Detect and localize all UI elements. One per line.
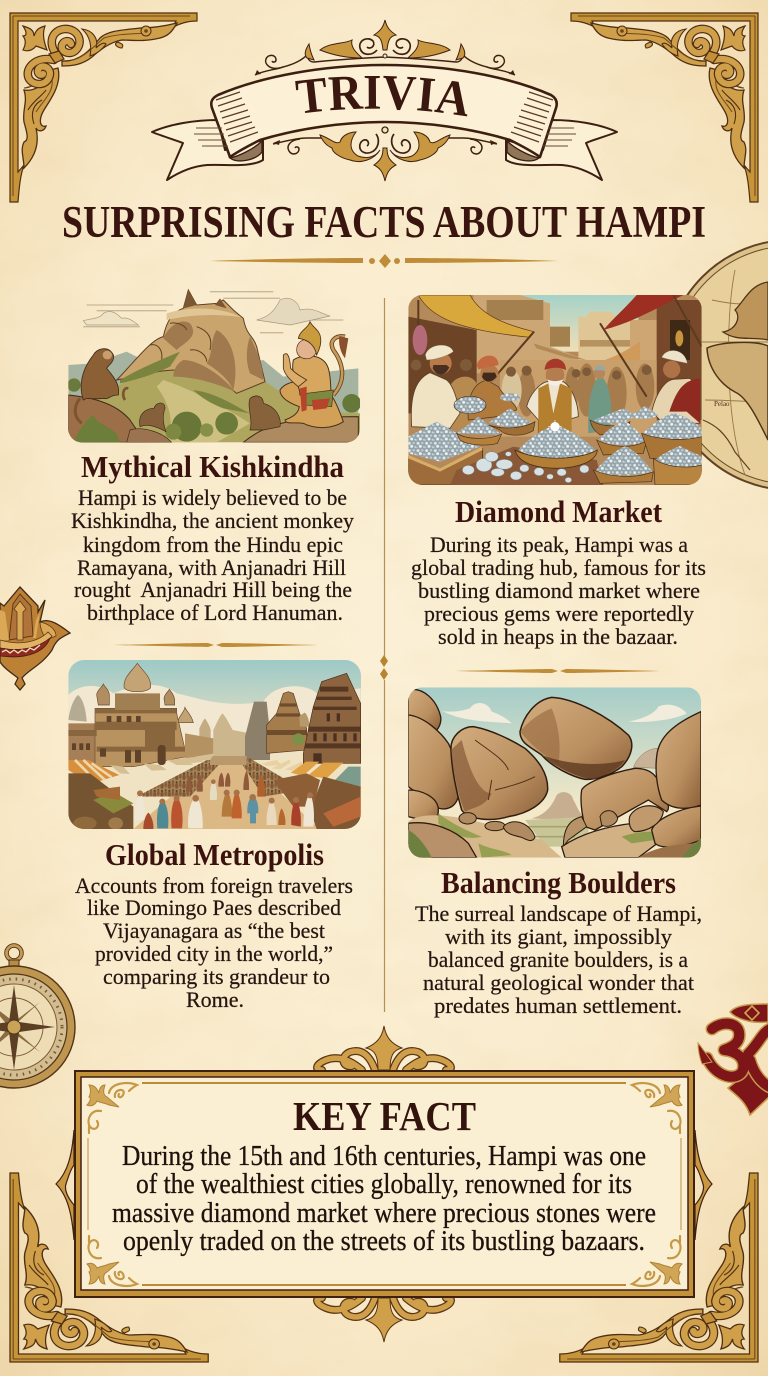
- left panel divider: [113, 643, 318, 647]
- corner ornament top left: [10, 13, 197, 202]
- corner ornament bottom right: [560, 1173, 758, 1362]
- body text: diamond market: bustling diamond market where: [418, 578, 700, 603]
- illustration: vijayanagara city street: [68, 660, 361, 830]
- panel: key fact: [56, 1026, 712, 1342]
- body text: mythical kishkindha: rought Anjanadri Hill being the: [74, 577, 352, 602]
- ornament below banner: [273, 127, 497, 181]
- body text: diamond market: precious gems were reportedly: [424, 601, 695, 626]
- left gold ornament: [0, 587, 70, 690]
- banner tails: [152, 120, 263, 180]
- body text: balancing boulders: natural geological wonder that: [423, 970, 695, 995]
- om symbol decoration: [698, 1004, 768, 1115]
- body text: global metropolis: like Domingo Paes described: [87, 895, 341, 920]
- key fact corner flourishes: [87, 1083, 682, 1286]
- key fact body text: [112, 1141, 656, 1257]
- key fact body text: openly traded on the streets of its bustling bazaars.: [123, 1226, 645, 1257]
- body text: global metropolis: provided city in the world,”: [95, 941, 333, 966]
- body text: global metropolis: Accounts from foreign travelers: [75, 873, 353, 898]
- column rule: [380, 298, 388, 1012]
- key fact side points: [56, 1130, 712, 1240]
- body text: diamond market: sold in heaps in the bazaar.: [438, 624, 678, 649]
- body text: balancing boulders: The surreal landscape of Hampi,: [415, 901, 702, 926]
- illustration: hanuman and monkeys at kishkindha hill: [67, 290, 361, 442]
- body text: balancing boulders: balanced granite boulders, is a: [428, 947, 688, 972]
- key fact bottom ornament: [317, 1298, 451, 1342]
- banner ribbon: [211, 65, 557, 157]
- compass decoration: [0, 946, 75, 1088]
- body text: balancing boulders: [415, 901, 702, 1018]
- body text: diamond market: During its peak, Hampi was a: [430, 532, 688, 557]
- title text: TRIVIA: [295, 76, 468, 116]
- key fact body text: During the 15th and 16th centuries, Hampi was one: [122, 1141, 646, 1172]
- body text: mythical kishkindha: kingdom from the Hindu epic: [83, 532, 343, 557]
- heading: global metropolis: Global Metropolis: [105, 837, 324, 872]
- body text: global metropolis: Vijayanagara as “the best: [103, 918, 326, 943]
- heading divider: [210, 254, 558, 268]
- world map decoration: [666, 240, 768, 490]
- body text: balancing boulders: with its giant, impossibly: [445, 924, 673, 949]
- panel: diamond market: [408, 295, 706, 649]
- key fact heading: KEY FACT: [293, 1093, 476, 1139]
- heading: balancing boulders: Balancing Boulders: [441, 865, 676, 900]
- ornament above banner: [255, 20, 515, 75]
- panel: global metropolis: [68, 660, 361, 1012]
- illustration: diamond bazaar: [408, 295, 702, 485]
- title text: [295, 76, 468, 116]
- body text: global metropolis: Rome.: [186, 987, 244, 1012]
- key fact body text: of the wealthiest cities globally, renowned for its: [136, 1169, 632, 1200]
- key fact body text: massive diamond market where precious stones were: [112, 1198, 656, 1229]
- heading: diamond market: Diamond Market: [455, 494, 663, 529]
- body text: global metropolis: comparing its grandeur to: [103, 964, 330, 989]
- key fact frame: [75, 1071, 694, 1297]
- body text: mythical kishkindha: birthplace of Lord Hanuman.: [87, 600, 343, 625]
- key fact top ornament: [317, 1026, 451, 1070]
- body text: mythical kishkindha: [71, 485, 355, 625]
- panel: mythical kishkindha: [67, 290, 361, 625]
- body text: diamond market: [411, 532, 706, 649]
- body text: mythical kishkindha: Hampi is widely believed to be: [78, 485, 347, 510]
- corner ornament top right: [571, 13, 758, 202]
- heading: mythical kishkindha: Mythical Kishkindha: [81, 449, 344, 484]
- corner ornament bottom left: [10, 1173, 208, 1362]
- body text: diamond market: global trading hub, famous for its: [411, 555, 706, 580]
- illustration: balancing granite boulders: [408, 687, 701, 858]
- panel: balancing boulders: [408, 687, 702, 1018]
- title banner: [151, 20, 618, 182]
- body text: mythical kishkindha: Ramayana, with Anjanadri Hill: [77, 555, 346, 580]
- right panel divider: [455, 669, 660, 673]
- body text: global metropolis: [75, 873, 353, 1012]
- body text: mythical kishkindha: Kishkindha, the ancient monkey: [71, 508, 355, 533]
- body text: balancing boulders: predates human settlement.: [434, 993, 682, 1018]
- world map decoration: Pelao: [714, 400, 730, 408]
